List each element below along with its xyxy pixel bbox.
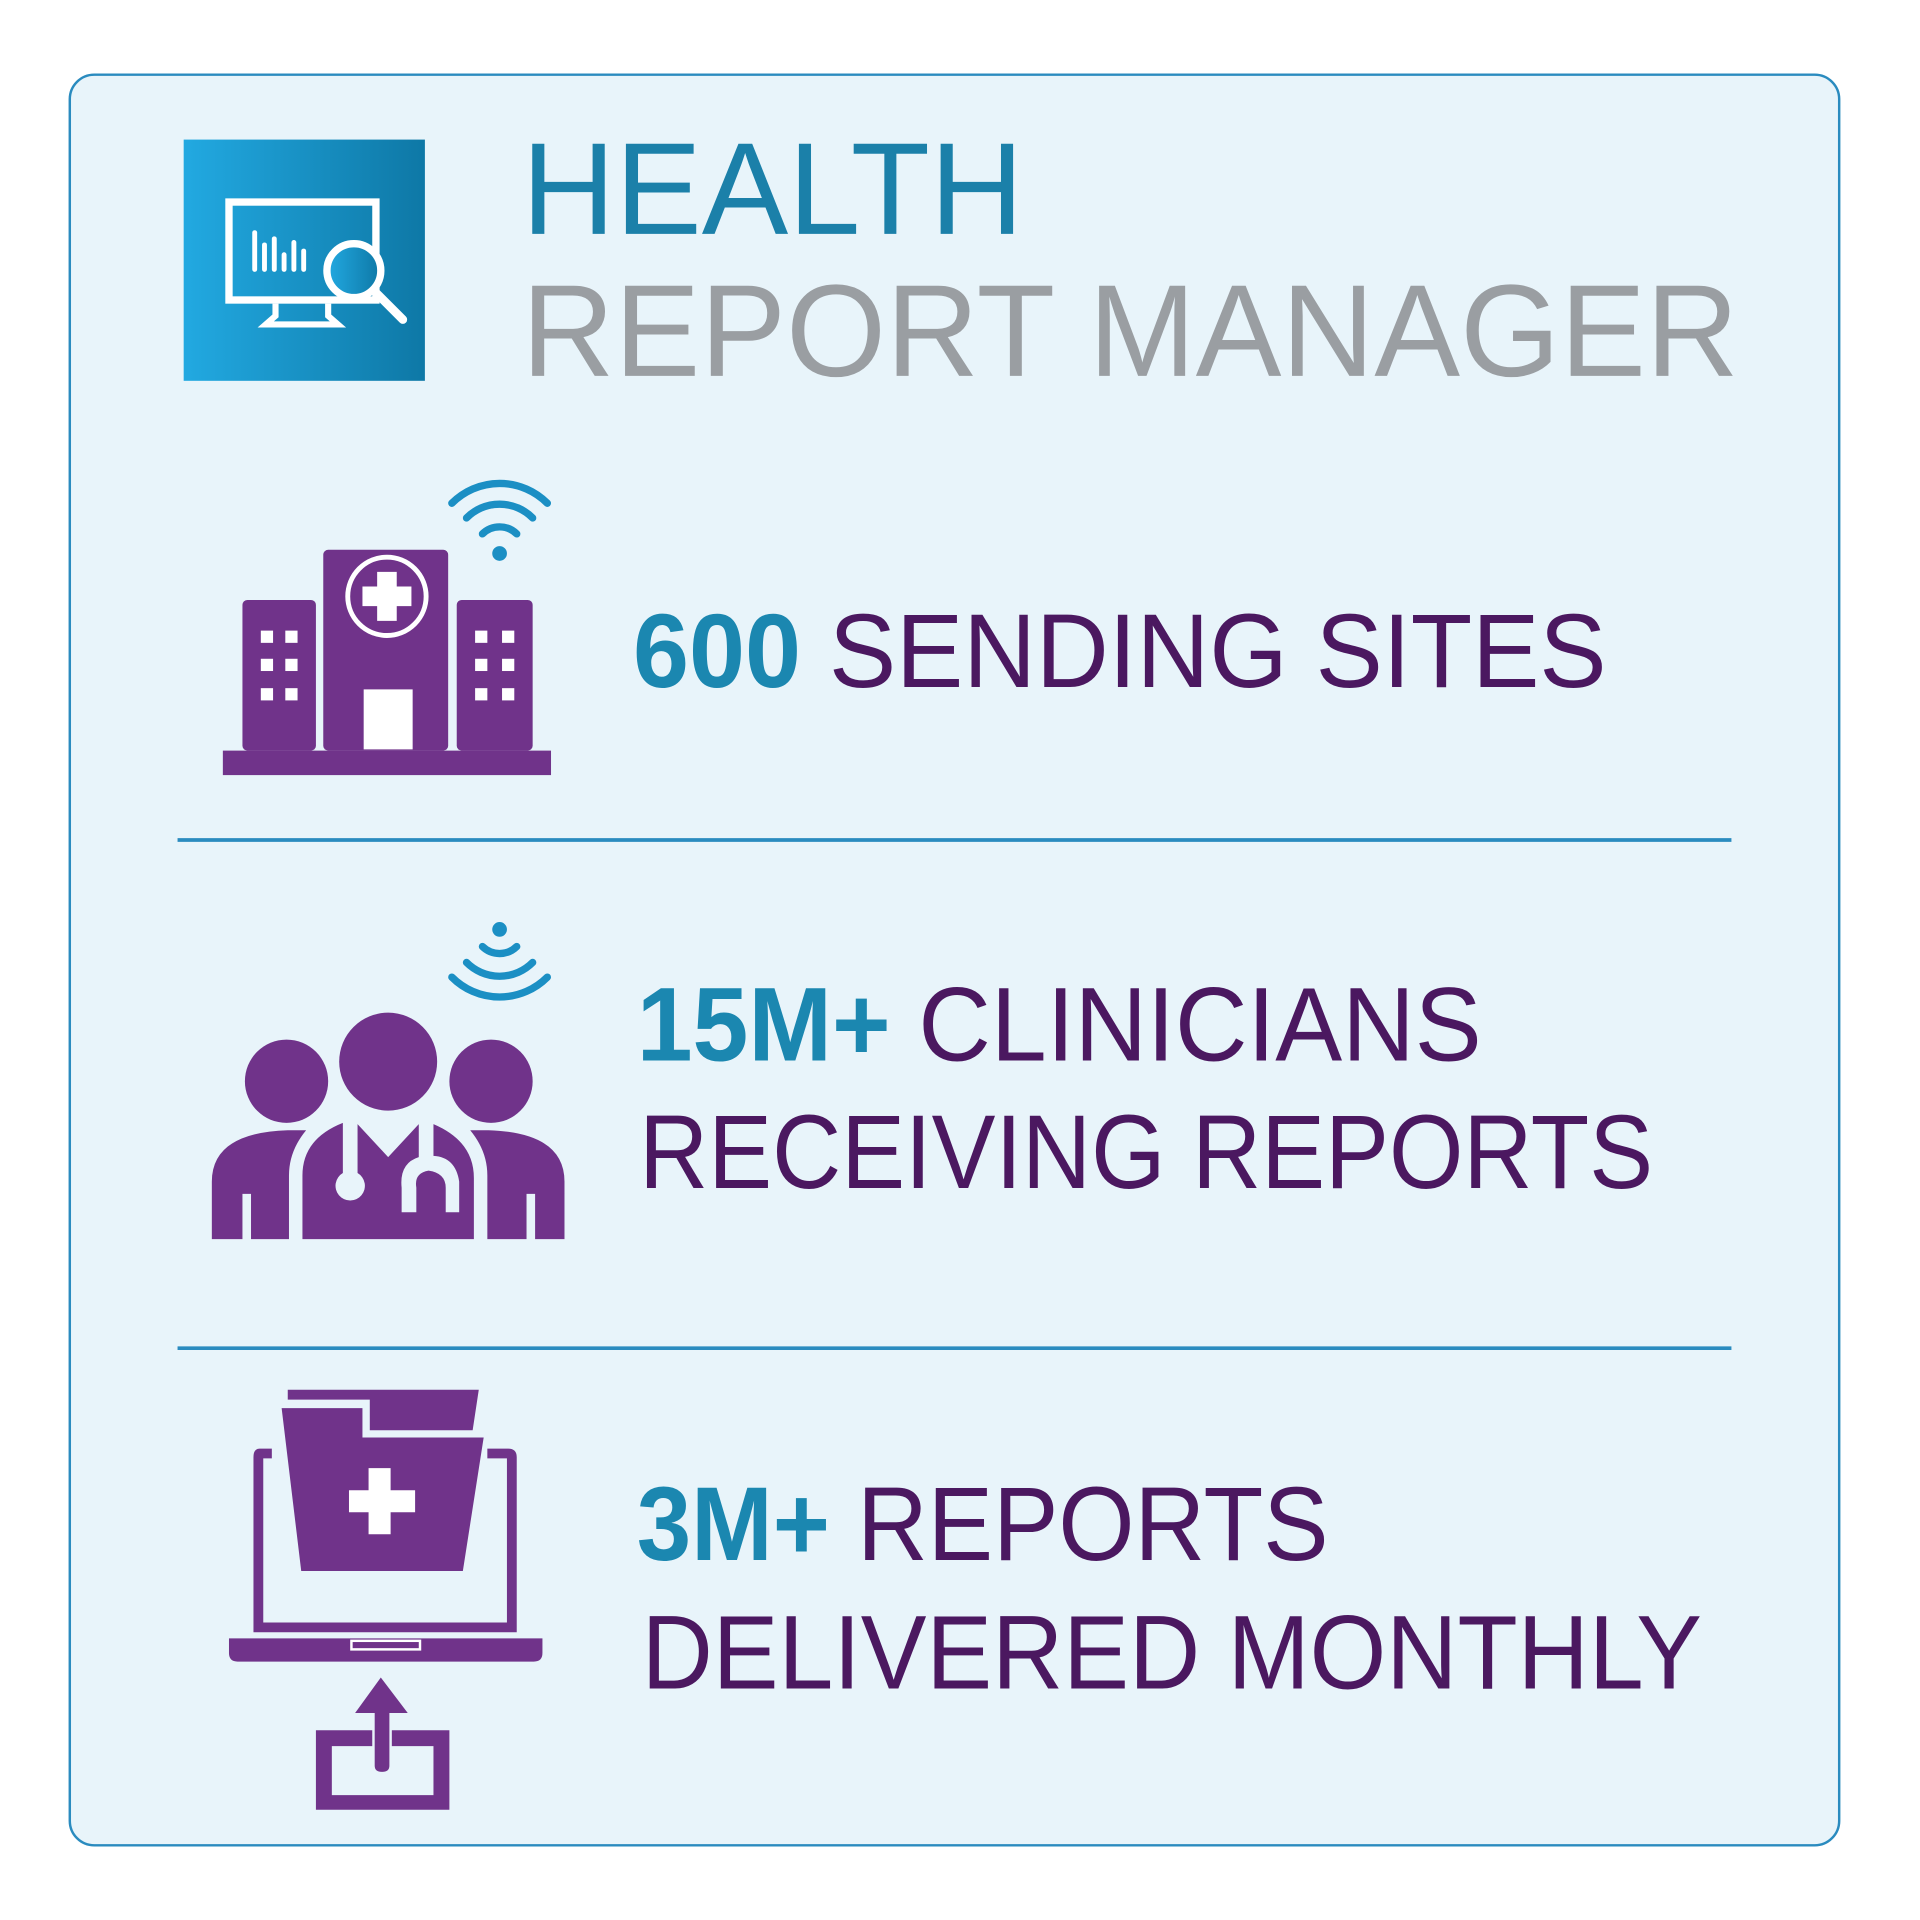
title: REPORT MANAGER (522, 257, 1739, 404)
icon: clinicians (212, 922, 564, 1239)
text: sending sites: 600 SENDING SITES (633, 593, 1607, 710)
text: reports (637, 1466, 1702, 1712)
text: clinicians (637, 966, 1653, 1211)
icon: hospital (223, 483, 551, 775)
text: reports: 3M+ REPORTS (637, 1466, 1329, 1583)
icon: laptop with folder (229, 1390, 542, 1810)
text: reports: DELIVERED MONTHLY (642, 1595, 1702, 1712)
title: HEALTH (522, 115, 1024, 262)
title (522, 115, 1739, 404)
text: clinicians: 15M+ CLINICIANS (637, 966, 1482, 1083)
icon: logo monitor (184, 140, 425, 381)
text: clinicians: RECEIVING REPORTS (639, 1094, 1653, 1211)
